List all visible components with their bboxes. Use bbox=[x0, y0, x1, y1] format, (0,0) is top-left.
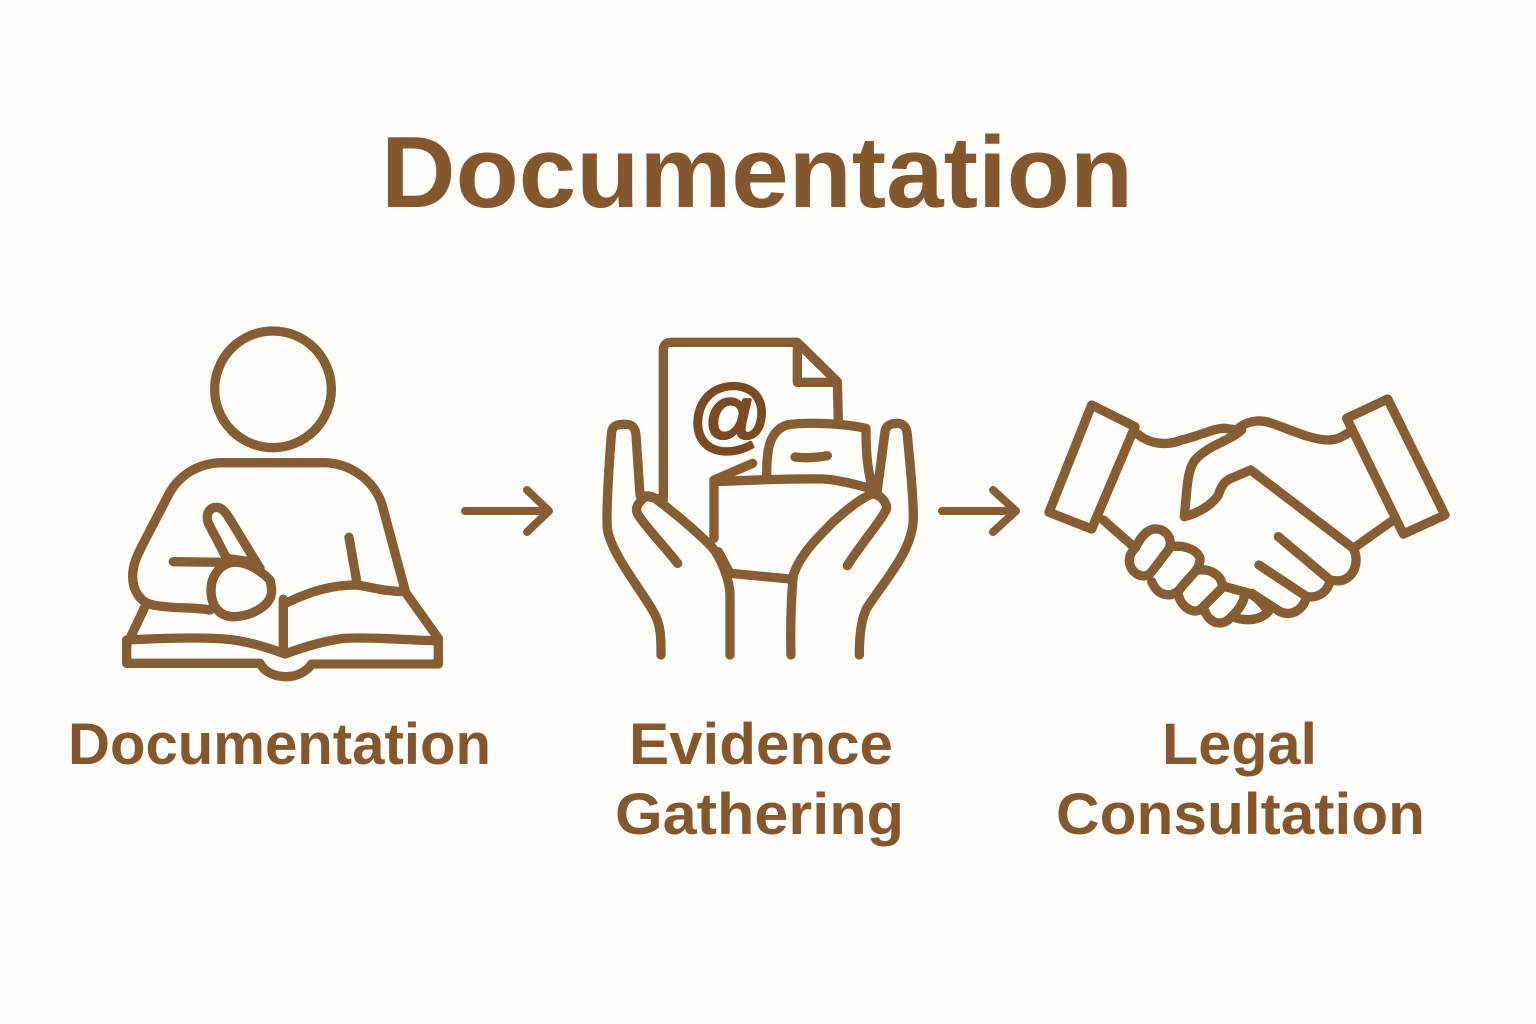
arrow: evidence to legal bbox=[942, 490, 1016, 532]
icon: handshake bbox=[1049, 399, 1445, 623]
label: legal consultation bbox=[1056, 712, 1425, 847]
label: legal consultation: Legal bbox=[1162, 712, 1317, 777]
icon: hands holding documents bbox=[607, 342, 913, 655]
label: documentation: Documentation bbox=[68, 712, 491, 777]
label: evidence gathering bbox=[615, 712, 904, 847]
icon: person writing in open book bbox=[127, 331, 438, 677]
title: Documentation bbox=[381, 117, 1133, 229]
icon: at sign: @ bbox=[689, 369, 771, 460]
label: legal consultation: Consultation bbox=[1056, 782, 1425, 847]
label: evidence gathering: Evidence bbox=[629, 712, 893, 777]
label: evidence gathering: Gathering bbox=[615, 782, 904, 847]
arrow: documentation to evidence bbox=[465, 490, 549, 532]
